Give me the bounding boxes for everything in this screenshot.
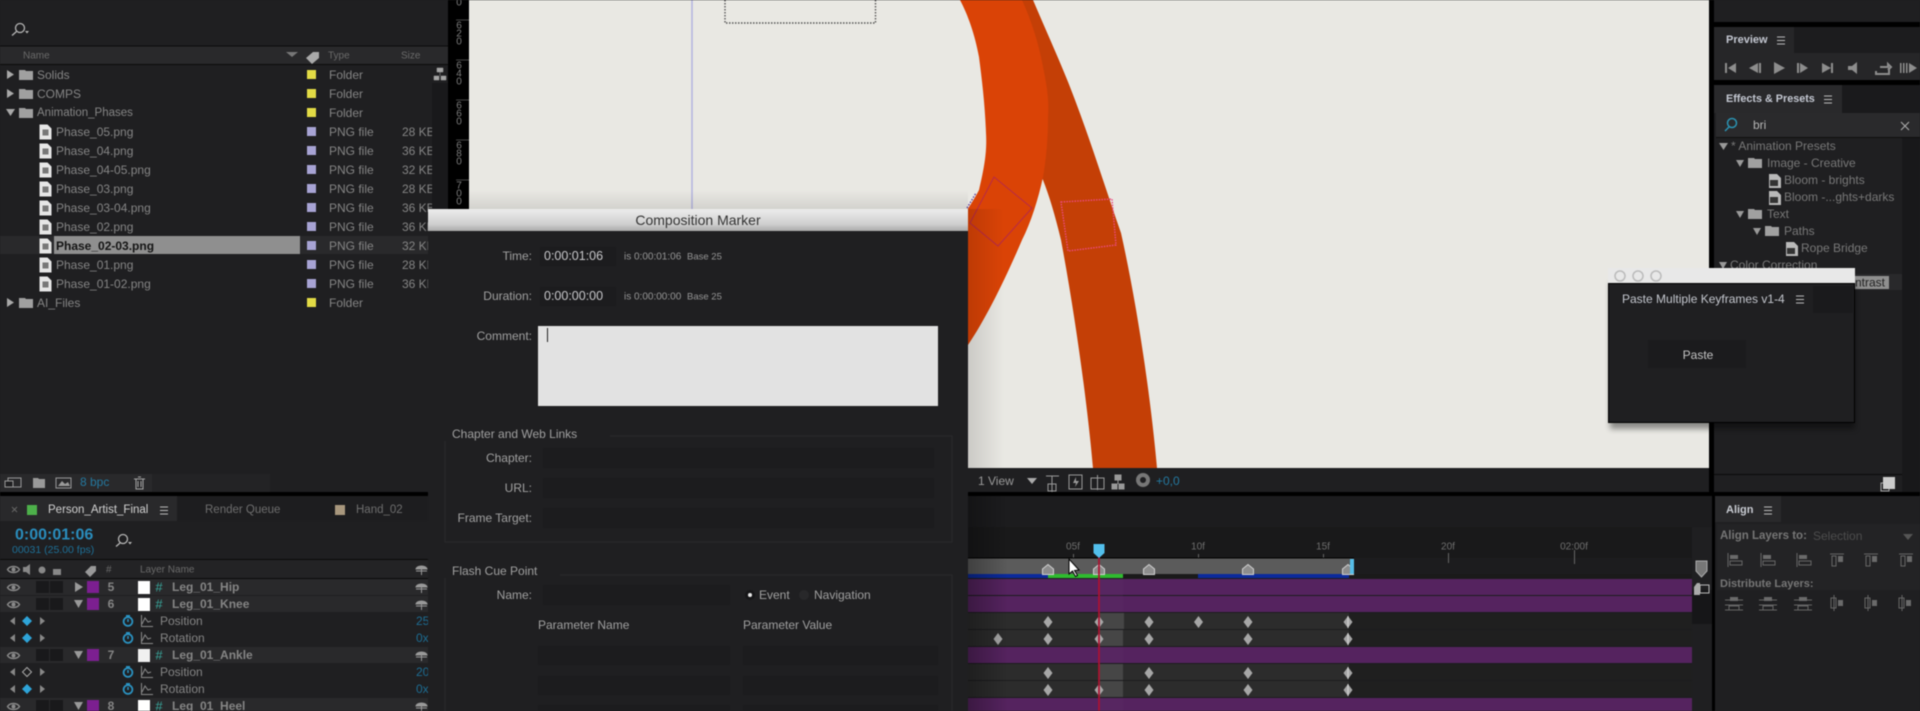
file rows: Phase_02-03.png (56, 239, 154, 253)
layer 6 rotation property (10, 631, 429, 645)
ruler: 2 (456, 28, 462, 40)
flash cue point group: Parameter Value (743, 618, 832, 632)
layer 6 position property: 25 (416, 614, 430, 628)
layer 7 row (0, 647, 430, 663)
chapter and web links group: Frame Target: (458, 511, 532, 525)
layer 5 row: # (155, 580, 163, 594)
layer 7 position property (10, 665, 430, 679)
chapter and web links group: URL: (505, 481, 532, 495)
layer column header (0, 560, 430, 578)
layer 7 rotation property: 0x (416, 682, 429, 696)
property rows (960, 579, 1692, 711)
time ruler: 05f (1066, 542, 1080, 552)
file rows: 36 KB (402, 220, 435, 234)
file rows: PNG file (329, 125, 374, 139)
file rows: PNG file (329, 163, 374, 177)
event and navigation radios (745, 588, 871, 602)
dotted purple bounds (967, 193, 976, 208)
effects search field (1716, 113, 1920, 138)
ruler: 0 (456, 76, 462, 88)
file rows: PNG file (329, 258, 374, 272)
highlighted effect row (1716, 274, 1902, 290)
file rows: Phase_02.png (56, 220, 133, 234)
project hierarchy icon (434, 68, 446, 80)
file rows: PNG file (329, 277, 374, 291)
layer 5 row (0, 579, 430, 595)
paste button (1648, 340, 1746, 368)
ruler: 0 (456, 196, 462, 208)
file rows: Phase_01.png (56, 258, 133, 272)
timeline end marker well (1692, 527, 1712, 711)
distribute layers row: Distribute Layers: (1720, 578, 1814, 590)
layer 8 row (0, 698, 430, 711)
project column header: Size (401, 50, 421, 62)
align layers row (1717, 524, 1920, 590)
effects tree: Image - Creative (1767, 156, 1856, 170)
panel: timeline left columns (0, 496, 430, 711)
panel: preview: Preview (1726, 34, 1768, 46)
ruler: 6 (456, 100, 462, 112)
window buttons (1615, 271, 1661, 281)
panel: project (0, 0, 448, 492)
event and navigation radios: Navigation (814, 588, 871, 602)
layer 7 row: 7 (108, 648, 115, 662)
time ruler: 20f (1441, 542, 1455, 552)
layer 5 row: Leg_01_Hip (172, 580, 239, 594)
highlighted effect row: ntrast (1855, 276, 1886, 290)
panel: align: Align (1726, 504, 1754, 516)
flash cue point group: Parameter Name (538, 618, 630, 632)
file rows: 28 KB (402, 258, 435, 272)
file rows: 36 KB (402, 277, 435, 291)
paste panel title: Paste Multiple Keyframes v1-4 (1622, 292, 1785, 306)
time row (502, 247, 722, 266)
panel: effects and presets: Effects & Presets (1726, 93, 1815, 105)
file rows: 36 KB (402, 144, 435, 158)
ruler: 6 (456, 140, 462, 152)
time ruler: 10f (1191, 542, 1205, 552)
file rows: PNG file (329, 144, 374, 158)
chapter and web links group: Chapter: (486, 451, 532, 465)
file rows: 28 KB (402, 125, 435, 139)
comment field: Comment: (477, 329, 532, 343)
flash cue point group (445, 564, 952, 711)
viewer toolbar: 1 View (978, 474, 1014, 488)
folder rows: Solids (37, 68, 70, 82)
playhead (1094, 544, 1104, 711)
effects tree: Paths (1784, 224, 1815, 238)
timeline tabs: Person_Artist_Final (48, 504, 148, 516)
effects search field: bri (1753, 118, 1766, 132)
artwork: back leg band (1005, 0, 1157, 468)
time ruler: 02:00f (1560, 542, 1588, 552)
file rows: Phase_03.png (56, 182, 133, 196)
new item icon (1881, 477, 1895, 491)
ruler: 6 (456, 60, 462, 72)
file rows (0, 124, 435, 292)
chapter and web links group (445, 427, 952, 542)
align layers row: Align Layers to: (1720, 530, 1807, 542)
chapter and web links group: Chapter and Web Links (452, 427, 577, 441)
project column header (0, 46, 448, 64)
project column header: Name (23, 50, 50, 62)
file rows: PNG file (329, 239, 374, 253)
file rows: 32 KB (402, 163, 435, 177)
panel: timeline graph (960, 496, 1712, 711)
project search icon (12, 24, 29, 36)
duration row: Duration: (483, 289, 532, 303)
ruler: 6 (456, 20, 462, 32)
dotted pink bounds (1061, 199, 1116, 251)
folder rows: COMPS (37, 87, 81, 101)
panel: effects and presets (1714, 85, 1920, 492)
duration row (483, 287, 722, 306)
project footer toolbar: 8 bpc (80, 475, 109, 489)
timeline tabs: Hand_02 (356, 504, 403, 516)
event and navigation radios: Event (759, 588, 790, 602)
paste button: Paste (1683, 348, 1714, 362)
keyframes (994, 616, 1352, 696)
flash cue point group: Flash Cue Point (452, 564, 538, 578)
file rows: 28 KB (402, 182, 435, 196)
ruler (449, 0, 469, 209)
selected row highlight (54, 236, 300, 254)
ruler: 0 (456, 188, 462, 200)
layer 6 rotation property: Rotation (160, 631, 205, 645)
ruler: 0 (456, 36, 462, 48)
duration row: is 0:00:00:00 (624, 292, 682, 302)
composition canvas (469, 0, 1709, 468)
file rows: PNG file (329, 201, 374, 215)
ruler: 7 (456, 180, 462, 192)
file rows: 36 KB (402, 201, 435, 215)
folder rows: Animation_Phases (37, 107, 133, 119)
timeline tabs (0, 496, 430, 521)
panel: align (1715, 496, 1920, 711)
viewer toolbar: +0,0 (1156, 474, 1180, 488)
work area bar (960, 558, 1692, 578)
preview transport controls (1725, 62, 1917, 74)
effects footer line (1714, 474, 1902, 476)
current time readout: 0:00:01:06 (15, 526, 93, 544)
file rows: Phase_03-04.png (56, 201, 151, 215)
align layers row: Selection (1813, 529, 1862, 543)
folder rows (6, 68, 363, 310)
dialog shadow on timeline edge (968, 496, 1008, 711)
layer column header: # (106, 564, 112, 576)
floating panel: paste multiple keyframes (1608, 268, 1855, 429)
panel: preview (1714, 0, 1920, 80)
effects tree: Rope Bridge (1801, 241, 1868, 255)
file rows: Phase_04-05.png (56, 163, 151, 177)
composition markers (1042, 559, 1354, 574)
aperture icon (1136, 473, 1150, 487)
layer 6 row: # (155, 596, 163, 612)
time row: Time: (502, 249, 532, 263)
effects scroll strip (1902, 138, 1920, 492)
file rows: 32 KB (402, 239, 435, 253)
dotted layer bounds (725, 0, 876, 23)
effects tree: * Animation Presets (1731, 139, 1836, 153)
layer 6 row (0, 596, 430, 612)
comment field (477, 326, 938, 406)
distribute layers row (1720, 578, 1911, 611)
layer 7 row: # (155, 648, 163, 662)
ruler: 0 (456, 156, 462, 168)
effects tree: Color Correction (1730, 258, 1817, 272)
file rows: PNG file (329, 182, 374, 196)
ruler: 4 (456, 68, 462, 80)
timeline tabs: Render Queue (205, 504, 280, 516)
layer 6 position property (10, 614, 430, 628)
purple layer bars (960, 579, 1692, 711)
dialog shadow on canvas (469, 190, 968, 210)
viewer tool icons (1046, 475, 1124, 492)
folder rows: Folder (329, 87, 363, 101)
file rows: PNG file (329, 220, 374, 234)
dialog shadow on canvas edge (968, 209, 1004, 468)
duration row: Base 25 (687, 292, 722, 302)
project scrollbar (432, 83, 448, 473)
dialog title bar: Composition Marker (635, 212, 761, 228)
layer 7 row: Leg_01_Ankle (172, 648, 253, 662)
effects tree: Bloom -...ghts+darks (1784, 190, 1894, 204)
layer 7 rotation property (10, 682, 429, 696)
mouse cursor (1069, 559, 1079, 576)
artwork: front leg band (950, 0, 1048, 345)
time row: 0:00:01:06 (544, 249, 603, 263)
time row: Base 25 (687, 252, 722, 262)
layer 6 position property: Position (160, 614, 203, 628)
layer 7 rotation property: Rotation (160, 682, 205, 696)
effects tree: Bloom - brights (1784, 173, 1865, 187)
current time readout (12, 526, 94, 556)
folder rows: Folder (329, 68, 363, 82)
timeline search icon (116, 534, 132, 546)
file rows: Phase_05.png (56, 125, 133, 139)
folder rows: Folder (329, 106, 363, 120)
layer 6 row: Leg_01_Knee (172, 597, 250, 611)
dialog title bar (428, 209, 968, 231)
file rows: Phase_04.png (56, 144, 133, 158)
current time readout: 00031 (25.00 fps) (12, 544, 94, 556)
layer 7 position property: 20 (416, 665, 430, 679)
file rows: Phase_01-02.png (56, 277, 151, 291)
layer 6 row: 6 (108, 597, 115, 611)
project column header: Type (328, 50, 350, 62)
layer column header: Layer Name (140, 564, 195, 576)
folder rows: Folder (329, 296, 363, 310)
layer 5 row: 5 (108, 580, 115, 594)
time ruler: 15f (1316, 542, 1330, 552)
effects tree (1719, 139, 1894, 272)
duration row: 0:00:00:00 (544, 289, 603, 303)
flash cue point group: Name: (497, 588, 532, 602)
layer 7 position property: Position (160, 665, 203, 679)
time ruler (960, 527, 1692, 564)
effects tree: Text (1767, 207, 1790, 221)
viewer toolbar (960, 468, 1709, 492)
guide line (691, 0, 693, 210)
ruler: 6 (456, 108, 462, 120)
project footer toolbar (0, 474, 270, 492)
dialog: composition marker (428, 209, 968, 711)
layer 6 rotation property: 0x (416, 631, 429, 645)
folder rows: AI_Files (37, 296, 80, 310)
time row: is 0:00:01:06 (624, 252, 682, 262)
marker diamond outline (970, 177, 1032, 246)
ruler: 0 (456, 116, 462, 128)
ruler: 8 (456, 148, 462, 160)
